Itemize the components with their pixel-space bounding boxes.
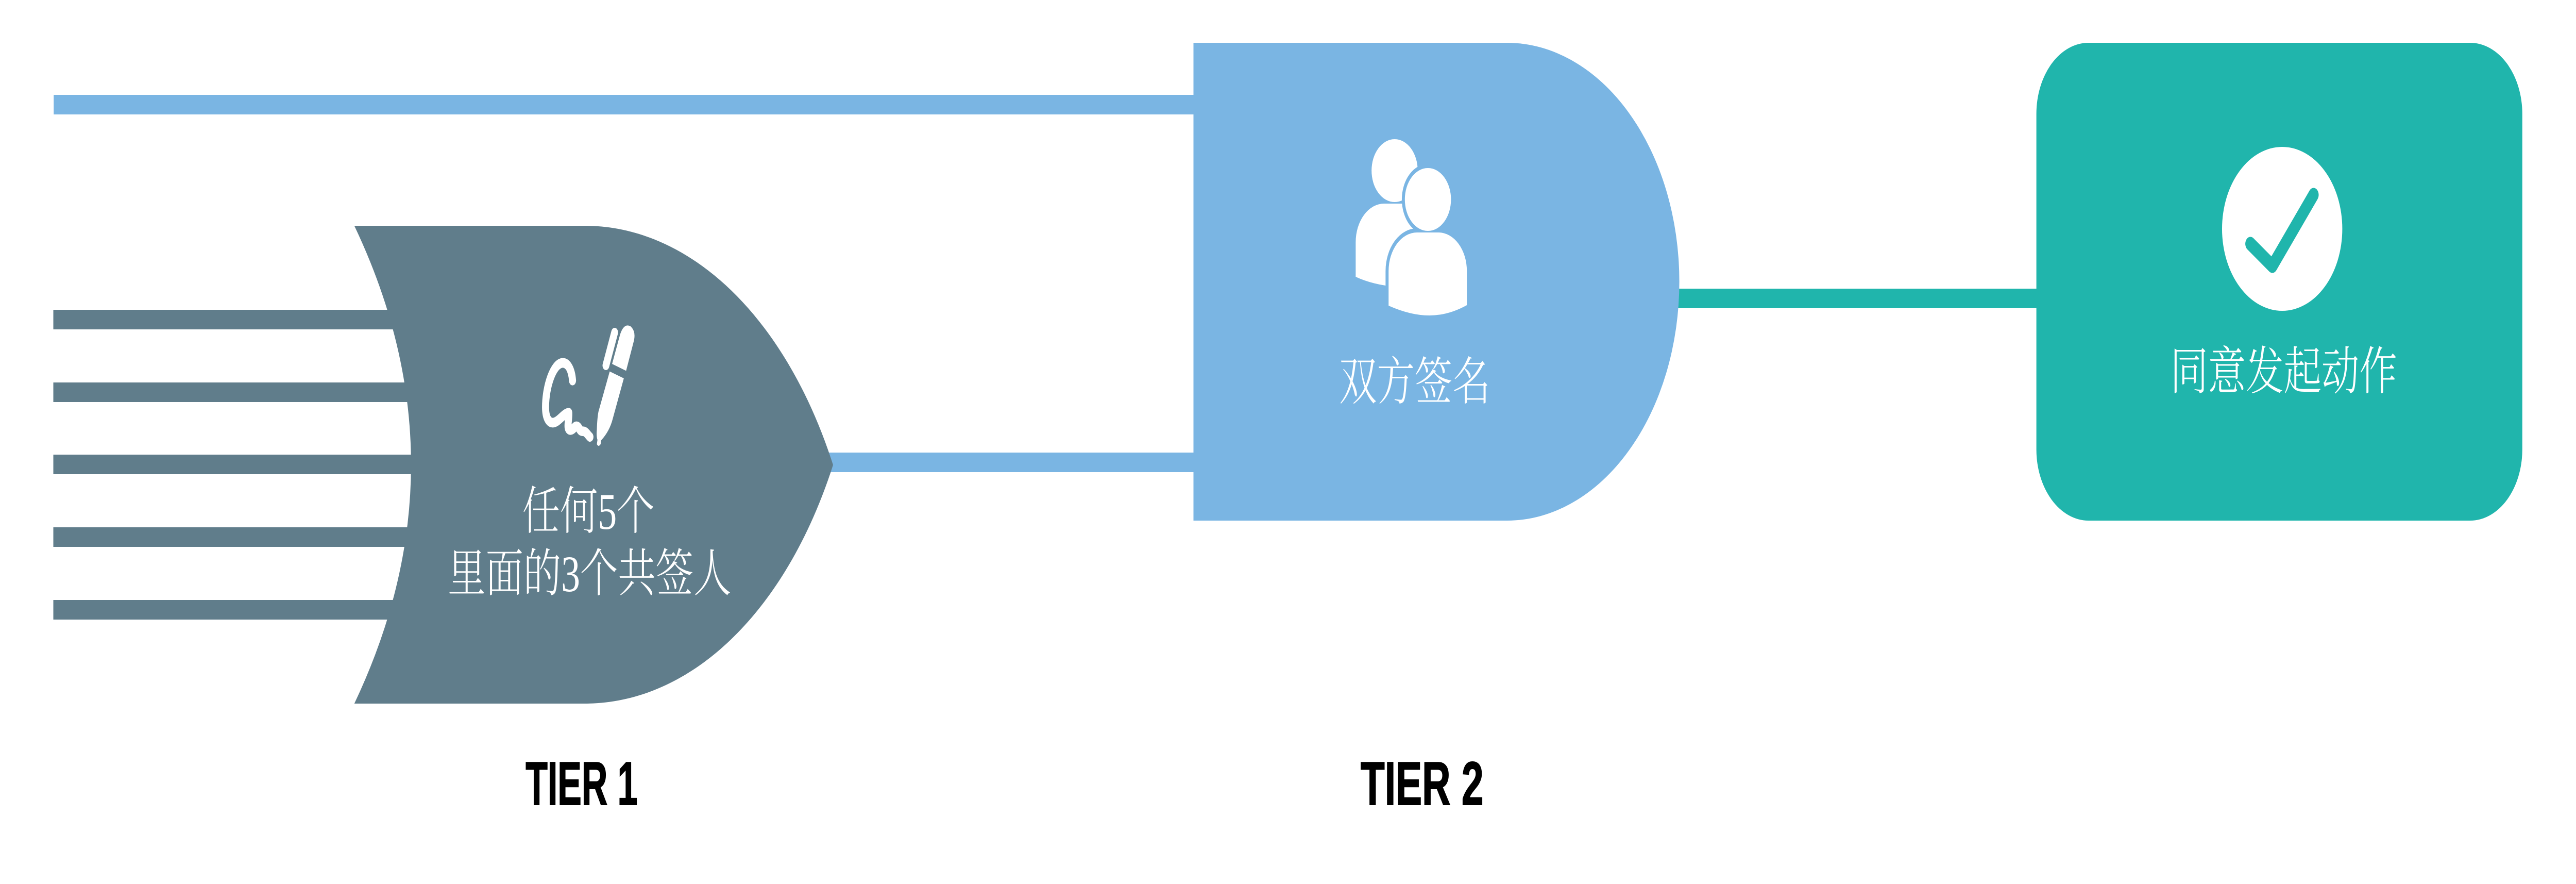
tier 1 label line 2: 里面的3个共签人 <box>448 545 732 603</box>
arrow: tier 2 output line to action <box>1675 289 2038 308</box>
gate shape <box>1194 43 1680 521</box>
heading: tier 1: TIER 1 <box>526 750 638 818</box>
action label: 同意发起动作 <box>2170 343 2397 401</box>
panel: tier 1 gate <box>354 226 833 704</box>
icon: signature and pen <box>546 325 635 446</box>
tier 2 label: 双方签名 <box>1339 354 1490 411</box>
heading: tier 2: TIER 2 <box>1361 750 1483 818</box>
tier 1 label line 1: 任何5个 <box>522 483 655 540</box>
tier 1 input lines <box>53 310 416 620</box>
arrow: tier 1 output line to tier 2 <box>821 453 1195 472</box>
action box <box>2037 43 2522 521</box>
panel: action <box>2037 43 2522 521</box>
icon: check mark <box>2222 147 2342 311</box>
icon: two people <box>1355 139 1467 315</box>
arrow: top input line to tier 2 <box>54 95 1196 114</box>
gate shape <box>354 226 833 704</box>
panel: tier 2 gate <box>1194 43 1680 521</box>
